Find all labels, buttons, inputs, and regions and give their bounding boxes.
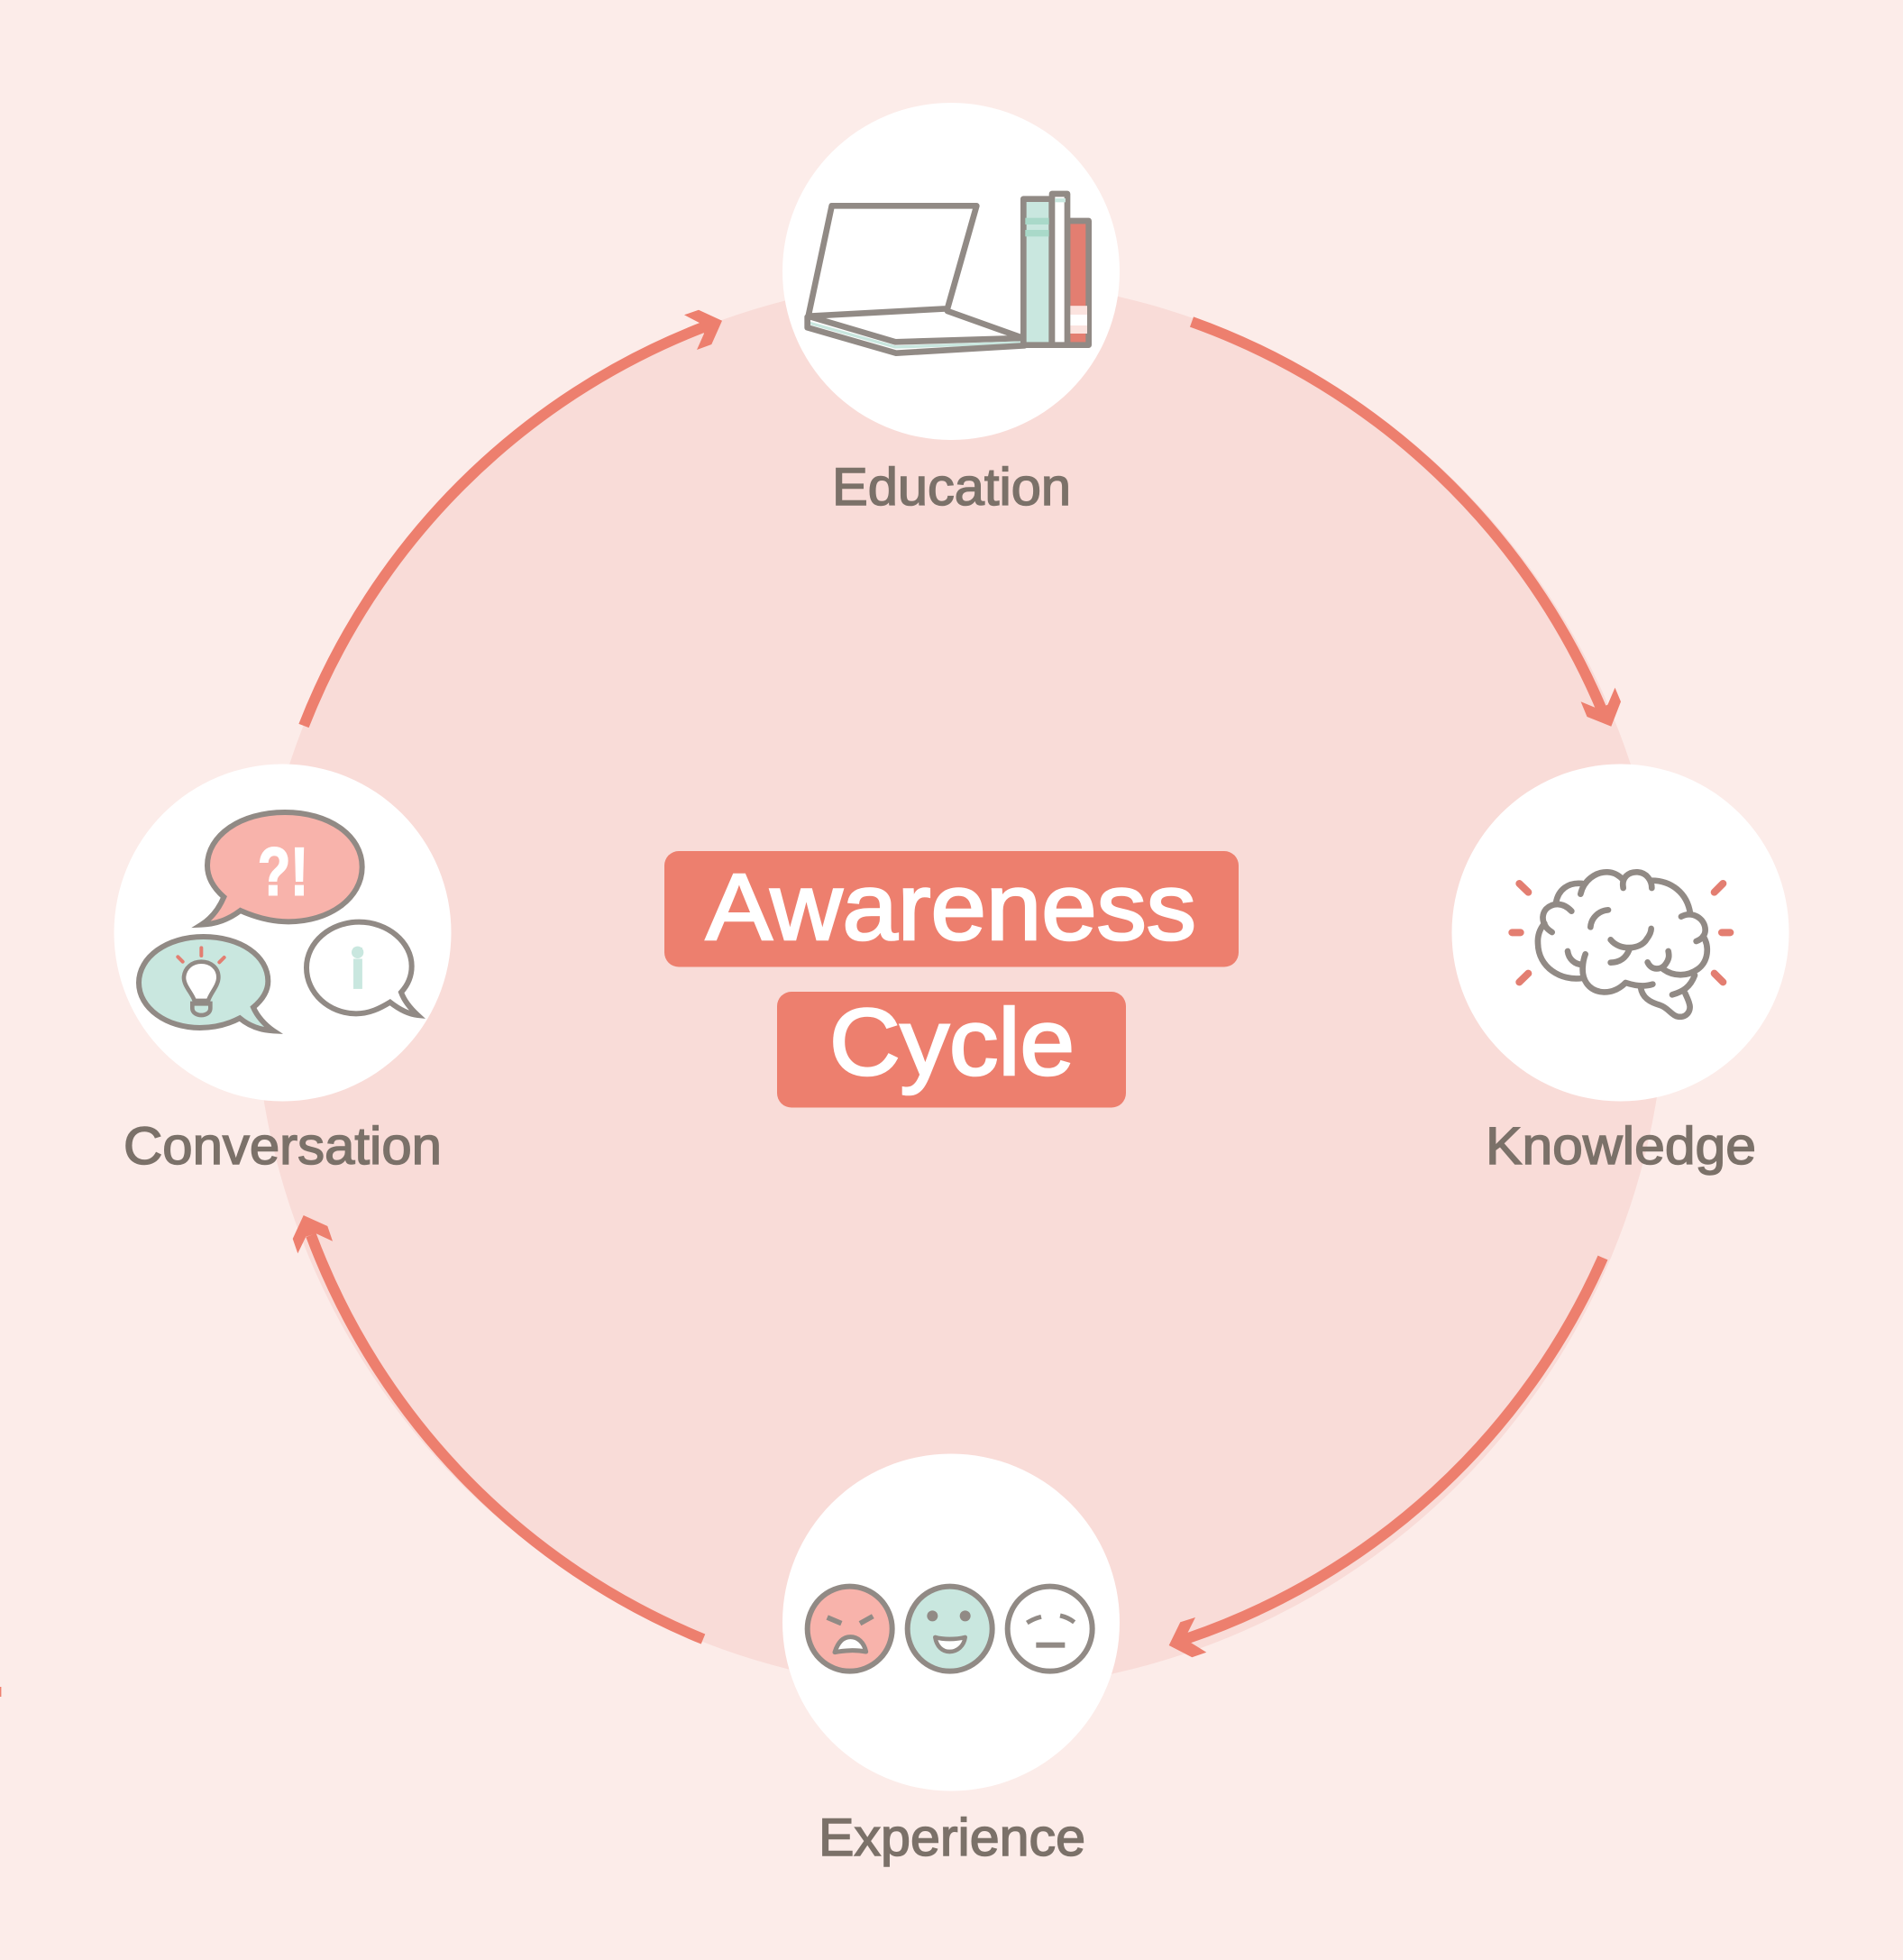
title bbox=[664, 851, 1239, 1107]
arrow: conversation to education bbox=[304, 310, 722, 726]
panel: conversation bbox=[114, 765, 451, 1176]
icon: angry face bbox=[808, 1587, 892, 1671]
icon: bubble with question and exclamation bbox=[201, 812, 362, 925]
icon: happy face bbox=[908, 1587, 993, 1671]
title badge: Cycle bbox=[777, 990, 1126, 1107]
title badge: Awareness: Awareness bbox=[706, 855, 1196, 960]
title badge: Cycle: Cycle bbox=[829, 990, 1075, 1095]
arrow: experience to conversation bbox=[293, 1215, 703, 1639]
panel: education bbox=[782, 103, 1120, 517]
label: Conversation: Conversation bbox=[124, 1117, 442, 1176]
icon: bubble with light bulb bbox=[139, 937, 273, 1030]
icon: bubble with info letter bbox=[306, 922, 417, 1015]
panel: knowledge bbox=[1451, 765, 1789, 1176]
icon: bubble with info letter: i bbox=[349, 939, 367, 1002]
arrow: education to knowledge bbox=[1192, 322, 1621, 727]
arrow: knowledge to experience bbox=[1169, 1258, 1603, 1657]
icon: laptop and books bbox=[808, 194, 1089, 353]
label: Experience: Experience bbox=[819, 1809, 1085, 1867]
icon: bubble with question and exclamation: ?! bbox=[258, 834, 308, 910]
label: Education: Education bbox=[832, 458, 1071, 517]
icon: neutral face bbox=[1008, 1587, 1093, 1671]
icon: speech bubbles bbox=[139, 812, 417, 1030]
icon: three faces bbox=[808, 1587, 1093, 1671]
background circle bbox=[254, 279, 1666, 1690]
icon: brain with rays bbox=[1512, 872, 1730, 1017]
panel: experience bbox=[782, 1453, 1120, 1867]
label: Knowledge: Knowledge bbox=[1486, 1117, 1756, 1176]
